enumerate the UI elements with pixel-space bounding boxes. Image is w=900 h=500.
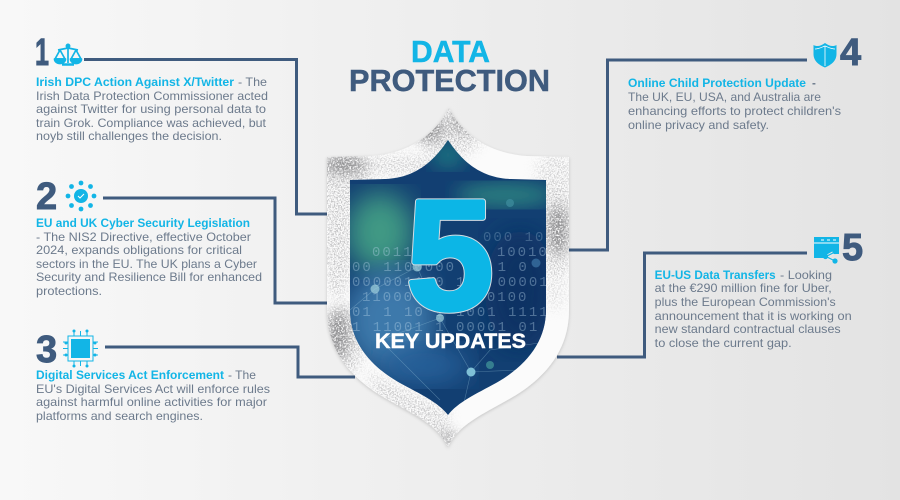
shield inner image: 0011 1 0 11 10010 — [372, 245, 549, 261]
title: DATA — [411, 34, 490, 69]
text: EU-US data transfers: plus the European Commission's — [655, 296, 836, 309]
icon: shield — [814, 43, 836, 68]
text: Irish DPC action: Irish DPC Action Against X/Twitter — [36, 76, 235, 89]
text: EU-US data transfers: EU-US Data Transfers — [655, 269, 776, 282]
shield inner image: 000001100 110 000010 — [352, 275, 560, 291]
panel: item 1 — [35, 32, 268, 143]
text: EU-US data transfers: - Looking — [780, 269, 832, 282]
text: Digital Services Act — [36, 369, 270, 423]
number 5: 5 — [842, 227, 863, 269]
text: Irish DPC action: against Twitter for using personal data to — [36, 103, 266, 116]
icon: EU stars with check — [66, 181, 96, 211]
connector 1 — [84, 60, 328, 214]
text: EU-US data transfers: new standard contractual clauses — [655, 323, 841, 336]
text: EU and UK legislation: protections. — [36, 285, 102, 298]
text: Online child protection: The UK, EU, USA, and Australia are — [628, 91, 821, 104]
text: EU-US data transfers — [655, 269, 852, 350]
shield inner image: 01 1 10 1 1001 1111 — [352, 305, 550, 321]
shield inner image: 000 1010 — [483, 230, 566, 246]
panel: item 2 — [36, 176, 262, 298]
connector 2 — [103, 198, 328, 303]
number 2: 2 — [36, 176, 57, 218]
text: Irish DPC action: - The — [238, 76, 267, 89]
title — [349, 34, 550, 98]
text: Online child protection: online privacy and safety. — [628, 119, 769, 132]
number 4: 4 — [840, 32, 861, 74]
text: Digital Services Act: against harmful online activities for major — [36, 396, 267, 409]
text: EU and UK legislation: EU and UK Cyber Security Legislation — [36, 217, 250, 230]
number 1: 1 — [35, 32, 49, 74]
text: Online child protection — [628, 77, 841, 132]
panel: item 4 — [628, 32, 861, 132]
text: Digital Services Act: platforms and search engines. — [36, 410, 203, 423]
shield inner image — [350, 140, 546, 415]
text: Irish DPC action: Irish Data Protection Commissioner acted — [36, 90, 268, 103]
text: Digital Services Act: EU's Digital Services Act will enforce rules — [36, 383, 270, 396]
text: EU and UK legislation: sectors in the EU. The UK plans a Cyber — [36, 258, 257, 271]
text: EU and UK legislation: - The NIS2 Directive, effective October — [36, 231, 251, 244]
text: EU and UK legislation: Security and Resilience Bill for enhanced — [36, 271, 262, 284]
text: EU and UK legislation: 2024, expands obligations for critical — [36, 244, 242, 257]
big number 5: 5 — [407, 169, 493, 343]
connector 5 — [557, 253, 807, 357]
panel: item 3 — [36, 329, 270, 423]
text: Digital Services Act: Digital Services Act Enforcement — [36, 369, 224, 382]
shield silver border — [326, 108, 570, 448]
title: PROTECTION — [349, 63, 550, 98]
shield inner image: 1 11001 1 00001 01 10 — [352, 320, 570, 336]
text: Digital Services Act: - The — [228, 369, 256, 382]
text: EU-US data transfers: to close the current gap. — [655, 337, 792, 350]
central shield — [326, 108, 570, 448]
number 3: 3 — [36, 329, 57, 371]
icon: scales of justice — [54, 44, 82, 64]
icon: microchip — [63, 330, 98, 368]
text: Online child protection: enhancing efforts to protect children's — [628, 105, 841, 118]
text: Irish DPC action: noyb still challenges the decision. — [36, 130, 222, 143]
shield inner image: 00 1100000 00 1 0 — [352, 260, 529, 276]
key updates label: KEY UPDATES — [375, 330, 526, 353]
text: Irish DPC action — [36, 76, 268, 143]
text: Online child protection: Online Child Protection Update — [628, 77, 807, 90]
text: EU-US data transfers: at the €290 million fine for Uber, — [655, 282, 832, 295]
icon: browser window with share — [814, 237, 839, 264]
text: EU-US data transfers: announcement that it is working on — [655, 310, 852, 323]
text: Irish DPC action: train Grok. Compliance was achieved, but — [36, 117, 267, 130]
shield inner image: 11000 0 10 00100 — [362, 290, 528, 306]
text: EU and UK legislation — [36, 217, 262, 298]
panel: item 5 — [655, 227, 863, 350]
connector 3 — [105, 347, 355, 377]
big number 5: 5 — [407, 169, 493, 343]
connector 4 — [568, 60, 807, 250]
text: Online child protection: - — [812, 77, 816, 90]
